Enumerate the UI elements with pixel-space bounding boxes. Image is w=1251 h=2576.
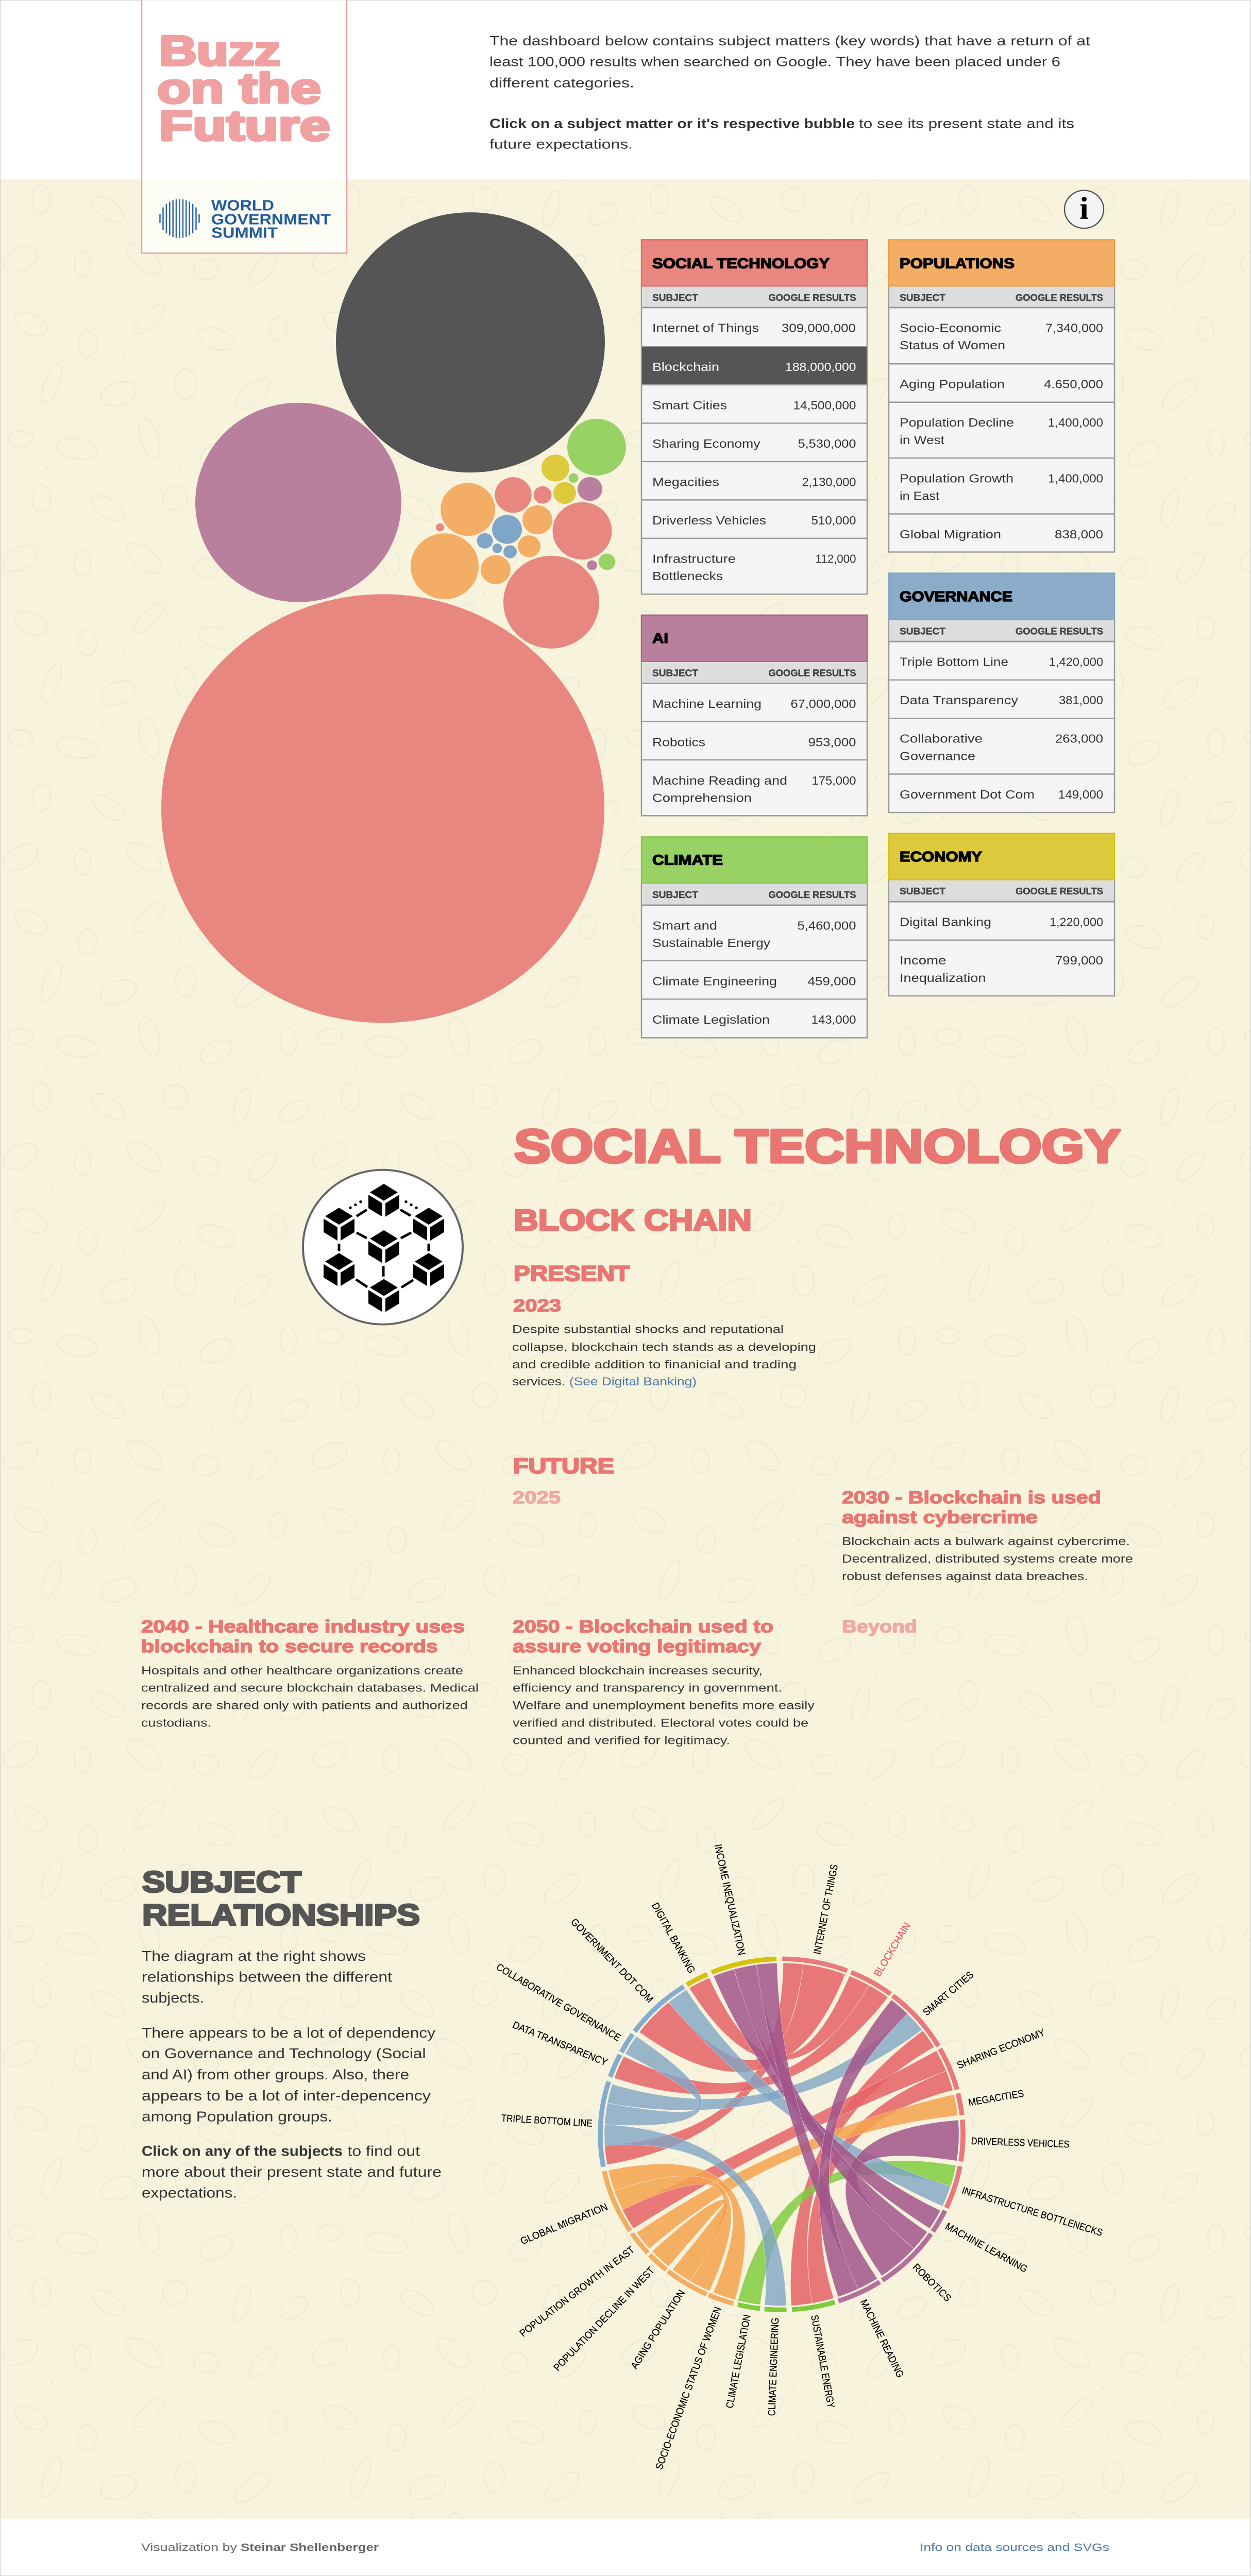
footer credit: Steinar Shellenberger xyxy=(241,2541,379,2554)
row: Population Growth in East: 1,400,000 xyxy=(1048,472,1103,485)
ribbons: population links xyxy=(608,2094,958,2300)
row: Digital Banking: 1,220,000 xyxy=(1050,916,1103,929)
row: Blockchain highlighted: 188,000,000 xyxy=(785,361,856,374)
future 2040 block: custodians. xyxy=(141,1717,211,1729)
ribbon: climate link xyxy=(738,2161,956,2304)
ribbons: AI links xyxy=(714,1963,959,2297)
row: Data Transparency: 381,000 xyxy=(1059,694,1103,707)
heading: Subject Relationships: RELATIONSHIPS xyxy=(142,1899,420,1931)
subject labels: SUSTAINABLE ENERGY xyxy=(808,2314,837,2409)
table header: AI xyxy=(641,615,867,662)
row: Sharing Economy xyxy=(641,423,867,451)
footer link: Info on data sources and SVGs xyxy=(920,2541,1109,2554)
text block: relationship explanation: subjects. xyxy=(142,1990,204,2006)
row: Collaborative Governance: Collaborative xyxy=(900,733,983,745)
bubble chart xyxy=(161,212,626,1023)
subject labels: MEGACITIES xyxy=(968,2088,1025,2108)
row: Machine Learning xyxy=(652,698,856,711)
row: Income Inequalization xyxy=(889,940,1114,985)
column headings xyxy=(641,286,867,308)
future 2040 block: records are shared only with patients and authorized xyxy=(141,1699,468,1711)
row: Population Decline in West: Population Decline xyxy=(900,417,1014,430)
row: Blockchain highlighted xyxy=(642,346,867,385)
title: Buzz xyxy=(159,27,280,74)
row: Robotics: 953,000 xyxy=(808,736,856,749)
text block: relationship explanation: appears to be a lot of inter-depencency xyxy=(142,2088,431,2104)
row: Climate Engineering: 459,000 xyxy=(807,975,856,989)
subject labels: DATA TRANSPARENCY xyxy=(511,2020,609,2068)
table header: governance xyxy=(889,573,1114,620)
intro text: Click on a subject matter or it's respective bubble xyxy=(489,116,855,131)
chord diagram xyxy=(494,1843,1104,2471)
future 2040 block: 2040 - Healthcare industry uses xyxy=(141,1617,465,1636)
subject labels: SHARING ECONOMY xyxy=(955,2027,1046,2071)
ribbons: social technology links xyxy=(605,1963,953,2306)
subject labels: SMART CITIES xyxy=(921,1969,976,2018)
row: Climate Legislation xyxy=(641,999,867,1027)
row: Climate Engineering: Climate Engineering xyxy=(652,975,777,989)
future 2030 block xyxy=(842,1488,1133,1583)
row: Smart and Sustainable Energy: 5,460,000 xyxy=(797,920,856,933)
heading: Social Technology: SOCIAL TECHNOLOGY xyxy=(514,1120,1121,1173)
subject labels xyxy=(494,1843,1104,2471)
text block: relationship explanation: to find out xyxy=(347,2143,420,2159)
future 2030 block: Blockchain acts a bulwark against cybercrime. xyxy=(842,1535,1130,1548)
table header: climate: CLIMATE xyxy=(652,852,723,868)
row: Machine Reading and Comprehension: Comprehension xyxy=(652,792,752,805)
future 2050 block: verified and distributed. Electoral votes could be xyxy=(513,1717,808,1729)
year 2023: 2023 xyxy=(513,1296,561,1315)
row: Megacities: 2,130,000 xyxy=(802,476,856,489)
future 2025: 2025 xyxy=(513,1488,561,1507)
row: Income Inequalization: 799,000 xyxy=(1055,954,1103,968)
row: Megacities: Megacities xyxy=(652,476,719,489)
row: Driverless Vehicles xyxy=(641,500,867,528)
row: Robotics: Robotics xyxy=(652,736,705,749)
row: Robotics xyxy=(641,721,867,749)
column headings: GOOGLE RESULTS xyxy=(1016,626,1103,637)
intro text: least 100,000 results when searched on Google. They have been placed under 6 xyxy=(489,54,1060,70)
subject labels: CLIMATE LEGISLATION xyxy=(724,2314,753,2409)
row: Data Transparency xyxy=(889,680,1114,707)
subject labels: INTERNET OF THINGS xyxy=(812,1863,840,1955)
text block: relationship explanation: There appears to be a lot of dependency xyxy=(142,2025,436,2041)
present description: collapse, blockchain tech stands as a developing xyxy=(512,1341,816,1353)
column headings: SUBJECT xyxy=(900,626,946,637)
row: Collaborative Governance: 263,000 xyxy=(1055,733,1103,745)
future 2050 block: 2050 - Blockchain used to xyxy=(513,1617,773,1636)
subject labels: COLLABORATIVE GOVERNANCE xyxy=(494,1961,623,2044)
row: Smart Cities: 14,500,000 xyxy=(793,399,856,412)
intro text: to see its present state and its xyxy=(859,116,1074,131)
text block: relationship explanation: relationships between the different xyxy=(142,1969,392,1986)
column headings xyxy=(889,286,1114,308)
future 2040 block: centralized and secure blockchain databases. Medical xyxy=(141,1682,479,1694)
subject labels: CLIMATE ENGINEERING xyxy=(766,2317,781,2416)
column headings: GOOGLE RESULTS xyxy=(769,292,856,303)
row: Population Decline in West xyxy=(889,402,1114,447)
table header: social technology xyxy=(641,240,867,286)
present description: Despite substantial shocks and reputational xyxy=(512,1323,784,1335)
subject labels: TRIPLE BOTTOM LINE xyxy=(501,2113,593,2129)
row: Government Dot Com xyxy=(889,774,1114,802)
column headings: GOOGLE RESULTS xyxy=(769,889,856,900)
future Beyond: Beyond xyxy=(842,1617,917,1636)
row: Income Inequalization: Income xyxy=(900,954,946,968)
logo wordmark: GOVERNMENT xyxy=(211,211,331,228)
row: Sharing Economy: 5,530,000 xyxy=(798,437,856,451)
panel: social technology table xyxy=(641,240,867,594)
row: Socio-Economic Status of Women xyxy=(900,322,1103,352)
text block: relationship explanation: Click on any of the subjects xyxy=(142,2143,343,2159)
future 2030 block: Decentralized, distributed systems create more xyxy=(842,1552,1133,1565)
icon: info button: i xyxy=(1079,191,1089,226)
present description: services. xyxy=(512,1375,565,1388)
row: Triple Bottom Line xyxy=(900,656,1103,669)
future 2050 block xyxy=(513,1617,815,1747)
future 2050 block: Welfare and unemployment benefits more easily xyxy=(513,1699,815,1711)
row: Machine Reading and Comprehension: 175,000 xyxy=(812,774,856,788)
row: Socio-Economic Status of Women: 7,340,000 xyxy=(1045,322,1103,335)
icon: striped sphere xyxy=(160,199,199,238)
table header: AI: AI xyxy=(652,630,668,647)
row: Triple Bottom Line: Triple Bottom Line xyxy=(900,656,1008,669)
row: Infrastructure Bottlenecks xyxy=(641,538,867,583)
row: Smart and Sustainable Energy xyxy=(652,920,856,950)
row: Government Dot Com: Government Dot Com xyxy=(900,788,1035,802)
column headings xyxy=(641,884,867,905)
heading: Subject Relationships xyxy=(142,1866,420,1931)
column headings: GOOGLE RESULTS xyxy=(1016,886,1103,896)
column headings: SUBJECT xyxy=(652,668,699,678)
row: Global Migration: 838,000 xyxy=(1055,528,1103,541)
intro text xyxy=(489,33,1091,151)
present description: and credible addition to finanicial and trading xyxy=(512,1358,797,1371)
row: Aging Population xyxy=(889,364,1114,392)
present description xyxy=(512,1323,816,1388)
row: Smart Cities: Smart Cities xyxy=(652,399,727,412)
subject labels: DRIVERLESS VEHICLES xyxy=(971,2136,1070,2150)
row: Collaborative Governance xyxy=(889,718,1114,763)
table header: populations: POPULATIONS xyxy=(900,256,1015,272)
present description: (See Digital Banking) xyxy=(569,1375,697,1388)
row: Digital Banking xyxy=(900,916,1103,929)
subject labels: DIGITAL BANKING xyxy=(649,1901,697,1975)
panel: AI table xyxy=(641,615,867,816)
text block: relationship explanation xyxy=(142,1948,442,2201)
panel: governance table xyxy=(889,573,1114,812)
title: Future xyxy=(159,102,330,149)
row: Climate Legislation: 143,000 xyxy=(811,1014,856,1027)
row: Megacities xyxy=(641,462,867,489)
row: Internet of Things: Internet of Things xyxy=(652,322,759,335)
row: Machine Reading and Comprehension: Machine Reading and xyxy=(652,774,787,788)
icon: blockchain cubes xyxy=(303,1170,463,1325)
subject labels: GLOBAL MIGRATION xyxy=(519,2201,610,2247)
table header: governance: GOVERNANCE xyxy=(900,588,1012,605)
row: Socio-Economic Status of Women: Socio-Economic xyxy=(900,322,1001,335)
future 2040 block: blockchain to secure records xyxy=(141,1637,438,1656)
subject labels: POPULATION DECLINE IN WEST xyxy=(551,2265,657,2373)
table header: climate xyxy=(641,837,867,883)
table header: populations xyxy=(889,240,1114,286)
table header: economy: ECONOMY xyxy=(900,849,982,865)
row: Global Migration xyxy=(889,514,1114,541)
future 2050 block: counted and verified for legitimacy. xyxy=(513,1734,730,1747)
row: Collaborative Governance: Governance xyxy=(900,750,975,763)
row: Internet of Things xyxy=(652,322,856,335)
outer ring segments xyxy=(600,1959,963,2310)
table header: social technology: SOCIAL TECHNOLOGY xyxy=(652,256,830,272)
subject labels: MACHINE LEARNING xyxy=(943,2221,1029,2275)
present 2023 block xyxy=(512,1296,816,1388)
future 2030 block: 2030 - Blockchain is used xyxy=(842,1488,1101,1507)
column headings: SUBJECT xyxy=(652,292,699,303)
panel: populations table xyxy=(889,240,1114,552)
column headings: SUBJECT xyxy=(652,889,699,900)
icon: info button xyxy=(1064,191,1104,228)
ribbons: governance links xyxy=(604,1990,951,2306)
future 2030 block: robust defenses against data breaches. xyxy=(842,1570,1088,1583)
subject labels: ROBOTICS xyxy=(910,2262,953,2304)
subject labels: GOVERNMENT DOT COM xyxy=(568,1917,655,2005)
row: Machine Learning: Machine Learning xyxy=(652,698,762,711)
row: Smart and Sustainable Energy: Smart and xyxy=(652,920,717,933)
row: Internet of Things: 309,000,000 xyxy=(782,322,856,335)
future 2040 block xyxy=(141,1617,479,1729)
row: Machine Learning: 67,000,000 xyxy=(790,698,856,711)
future 2050 block: efficiency and transparency in government. xyxy=(513,1682,782,1694)
intro text: future expectations. xyxy=(489,137,633,151)
heading: Future: FUTURE xyxy=(513,1454,614,1478)
column headings: SUBJECT xyxy=(900,886,946,896)
row: Climate Engineering xyxy=(641,961,867,989)
column headings xyxy=(889,620,1114,641)
row: Smart and Sustainable Energy: Sustainable Energy xyxy=(652,937,770,950)
column headings: GOOGLE RESULTS xyxy=(1016,292,1103,303)
row: Aging Population: 4.650,000 xyxy=(1044,378,1103,392)
row: Machine Reading and Comprehension xyxy=(641,760,867,805)
logo wordmark: SUMMIT xyxy=(211,225,278,241)
table header: economy xyxy=(889,834,1114,880)
logo: World Government Summit xyxy=(160,197,331,241)
row: Smart Cities xyxy=(641,385,867,412)
text block: relationship explanation: on Governance and Technology (Social xyxy=(142,2046,426,2062)
row: Socio-Economic Status of Women: Status of Women xyxy=(900,340,1005,352)
row: Climate Legislation: Climate Legislation xyxy=(652,1014,770,1027)
logo wordmark xyxy=(211,197,331,241)
future 2050 block: Enhanced blockchain increases security, xyxy=(513,1664,763,1677)
subject labels: BLOCKCHAIN xyxy=(872,1921,913,1978)
row: Population Growth in East: Population Growth xyxy=(900,472,1013,485)
row: Driverless Vehicles: 510,000 xyxy=(811,514,856,528)
subject labels: INCOME INEQUALIZATION xyxy=(712,1843,748,1956)
row: Global Migration: Global Migration xyxy=(900,528,1001,541)
column headings xyxy=(641,662,867,683)
row: Population Decline in West: 1,400,000 xyxy=(1048,417,1103,430)
future 2040 block: Hospitals and other healthcare organizations create xyxy=(141,1664,463,1677)
row: Sharing Economy: Sharing Economy xyxy=(652,437,760,451)
row: Population Growth in East xyxy=(889,458,1114,503)
row: Blockchain highlighted: Blockchain xyxy=(652,361,719,374)
row: Income Inequalization: Inequalization xyxy=(900,972,986,985)
row: Population Decline in West: in West xyxy=(900,434,944,447)
heading: Block Chain: BLOCK CHAIN xyxy=(514,1204,752,1237)
text block: relationship explanation: among Population groups. xyxy=(142,2109,332,2125)
subject labels: POPULATION GROWTH IN EAST xyxy=(517,2244,637,2339)
row: Triple Bottom Line: 1,420,000 xyxy=(1049,656,1103,669)
row: Digital Banking: Digital Banking xyxy=(900,916,991,929)
panel: climate table xyxy=(641,837,867,1038)
heading: Subject Relationships: SUBJECT xyxy=(142,1866,301,1899)
row: Infrastructure Bottlenecks: Bottlenecks xyxy=(652,570,723,583)
row: Infrastructure Bottlenecks: Infrastructure xyxy=(652,553,736,566)
intro text: different categories. xyxy=(489,75,634,90)
row: Driverless Vehicles: Driverless Vehicles xyxy=(652,514,766,528)
footer credit xyxy=(141,2541,379,2554)
subject labels: MACHINE READING xyxy=(858,2298,906,2380)
column headings: GOOGLE RESULTS xyxy=(769,668,856,678)
future 2030 block: against cybercrime xyxy=(842,1508,1038,1528)
footer credit: Visualization by xyxy=(141,2541,237,2554)
text block: relationship explanation: The diagram at the right shows xyxy=(142,1948,366,1964)
heading: Present: PRESENT xyxy=(514,1262,630,1285)
row: Government Dot Com: 149,000 xyxy=(1058,788,1103,802)
subject labels: INFRASTRUCTURE BOTTLENECKS xyxy=(960,2185,1104,2239)
subject labels: AGING POPULATION xyxy=(629,2288,687,2371)
row: Data Transparency: Data Transparency xyxy=(900,694,1018,707)
title xyxy=(157,27,330,149)
column headings xyxy=(889,880,1114,902)
subject labels: SOCIO-ECONOMIC STATUS OF WOMEN xyxy=(653,2306,724,2471)
logo wordmark: WORLD xyxy=(211,197,274,214)
title card xyxy=(142,0,347,253)
text block: relationship explanation: expectations. xyxy=(142,2185,237,2201)
row: Aging Population: Aging Population xyxy=(900,378,1005,392)
text block: relationship explanation: and AI) from other groups. Also, there xyxy=(142,2066,409,2083)
text block: relationship explanation: more about their present state and future xyxy=(142,2164,442,2180)
future 2050 block: assure voting legitimacy xyxy=(513,1637,761,1656)
panel: economy table xyxy=(889,834,1114,996)
column headings: SUBJECT xyxy=(900,292,946,303)
title: on the xyxy=(157,65,321,112)
intro text: The dashboard below contains subject matters (key words) that have a return of at xyxy=(489,33,1091,48)
row: Infrastructure Bottlenecks: 112,000 xyxy=(815,553,856,566)
row: Population Growth in East: in East xyxy=(900,490,939,503)
